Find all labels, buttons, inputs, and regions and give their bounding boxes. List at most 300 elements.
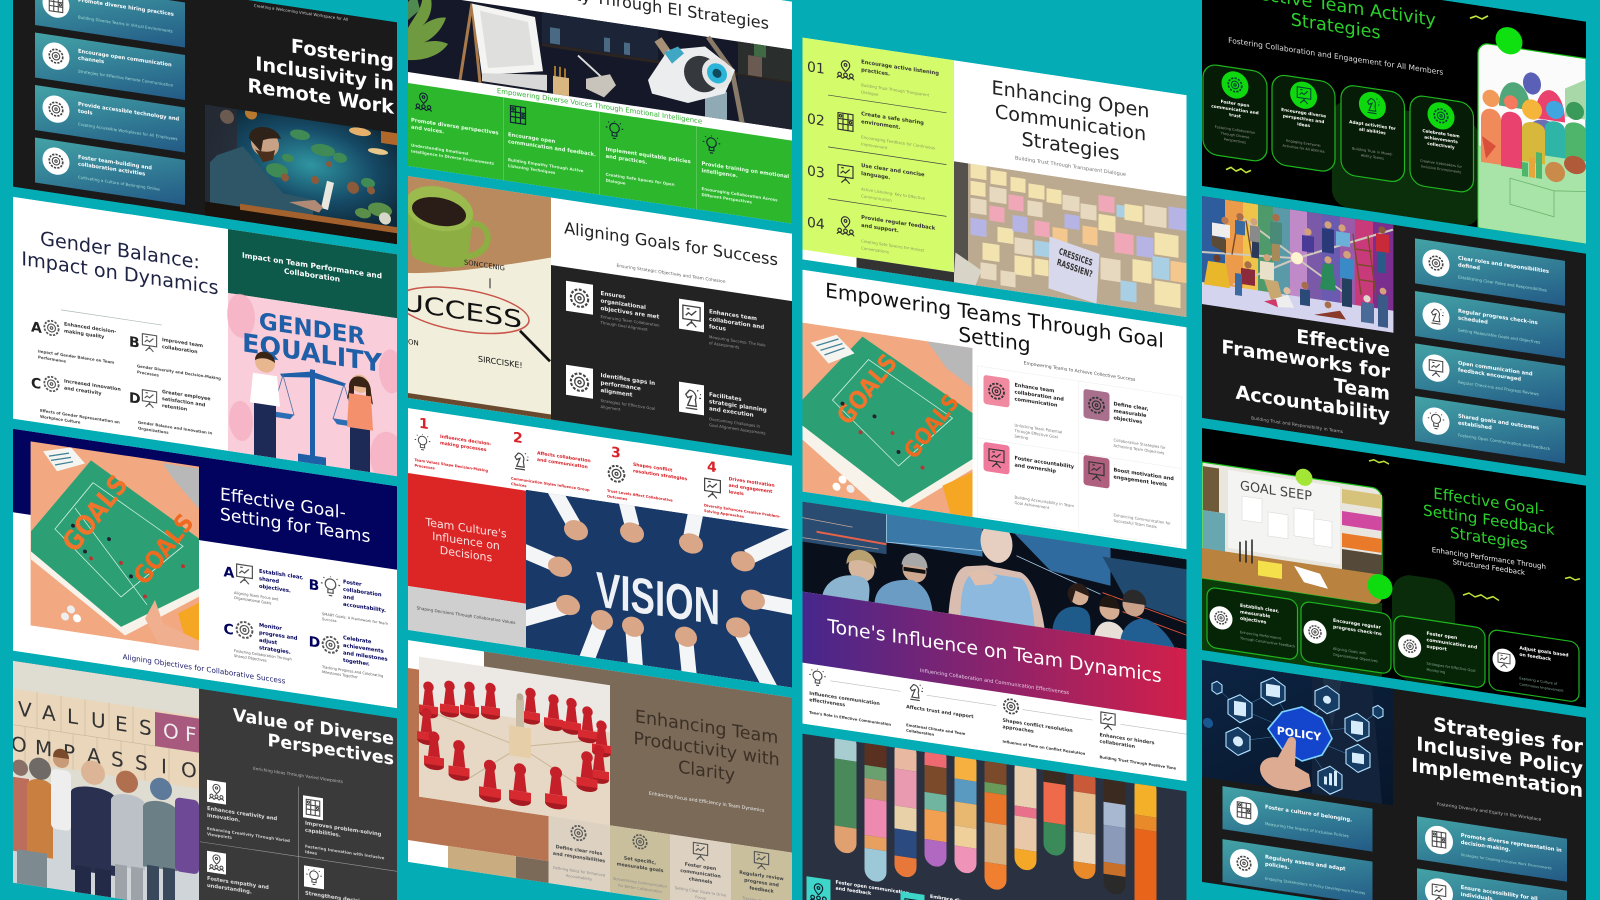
- item: embrace: [900, 889, 991, 900]
- title: Inclusive Policy: [1416, 732, 1583, 780]
- card 4: Successful Team Goals: [1114, 518, 1157, 529]
- card: encourage open communication: channels: [78, 55, 104, 65]
- subtitle: Enriching Ideas Through Varied Viewpoints: [253, 766, 343, 784]
- card 4: feedback: [749, 885, 774, 895]
- slide: Effective Goal-Setting Feedback Strategies: [1202, 428, 1586, 708]
- card 1: Enhancing Performance: [1240, 630, 1281, 641]
- item D: and milestones: [343, 650, 388, 663]
- image: values of compassion blocks and people: S: [139, 715, 152, 740]
- item B: Improved team: [162, 338, 203, 349]
- title: Fostering: [291, 34, 394, 73]
- card: accessible technology: Provide accessible technology and: [78, 101, 179, 123]
- image: coffee and success notebook: UCCESS: [402, 288, 522, 334]
- image: values of compassion blocks and people: U: [91, 708, 106, 734]
- column dividers: [504, 97, 696, 209]
- item B: collaboration: [162, 344, 198, 355]
- image: sticky note wall: [954, 161, 1186, 317]
- title: Setting for Teams: [220, 505, 370, 547]
- item C: strategies.: [259, 645, 291, 656]
- item 01: practices.: [861, 67, 890, 78]
- title: Clarity: [678, 758, 735, 786]
- card 2: objectives: [1114, 415, 1142, 426]
- title: Effective: [1296, 325, 1390, 362]
- subtitle: Fostering Collaboration and Engagement for All Members: [1228, 36, 1443, 77]
- image: gender equality poster: [227, 293, 397, 476]
- item D: Greater employee: [162, 390, 211, 402]
- card 2: Encourage diverse: [1281, 108, 1326, 120]
- item 4: Solving Approaches: [704, 509, 744, 519]
- item 2: and communication: [537, 457, 588, 470]
- title: Strategies: [1450, 524, 1528, 553]
- slide: Fostering Inclusivity in Remote Work: [13, 0, 397, 244]
- title: Effective Goal-: [220, 485, 346, 524]
- card 1: Defining Roles for Enhanced: [553, 866, 605, 878]
- item C: [32, 376, 120, 424]
- title: Perspectives: [268, 731, 394, 770]
- card 1: communication and: [1211, 103, 1259, 116]
- slide: Gender Balance: [13, 197, 406, 487]
- card: foster culture: Foster a culture of belonging.: [1265, 804, 1352, 823]
- card: encourage open communication: Encourage open communication: [78, 48, 172, 68]
- item 3: Strategies for Effective Goal: [600, 398, 655, 411]
- item 3: alignment: [600, 388, 633, 399]
- image: values of compassion blocks and people: E: [115, 711, 128, 737]
- item 03: [807, 155, 926, 208]
- title: Empowering Teams Through Goal: [825, 278, 1164, 353]
- title: Value of Diverse: [233, 706, 394, 750]
- divider: [828, 95, 946, 216]
- card 3: feedback encouraged: [1458, 367, 1521, 383]
- item A: A: [224, 564, 234, 582]
- item 2: of Assessments: [709, 340, 739, 350]
- item 04: [807, 207, 936, 261]
- green heading panel: [228, 229, 397, 318]
- image: values of compassion blocks and people: P: [63, 739, 75, 765]
- card 2: Engaging Everyone:: [1286, 139, 1321, 148]
- dark panel: [551, 265, 792, 456]
- item 01: [807, 51, 939, 106]
- image: sticky note wall: CRESSICES: [1058, 247, 1093, 269]
- item B: and: [343, 594, 354, 602]
- column 1: Understanding Emotional: [411, 142, 468, 156]
- column 4: Encouraging Collaboration Across: [702, 186, 778, 202]
- card 4: Boost motivation and: [1114, 467, 1174, 482]
- red title panel: Influence on: [432, 530, 500, 553]
- card 2: Encourage regular: [1333, 619, 1381, 631]
- item D: Tracking Progress and Celebrating: [322, 665, 383, 678]
- item B: B: [129, 334, 140, 352]
- item 3: Shapes conflict resolution: [1002, 719, 1073, 734]
- item 03: Active Listening: Key to Effective: [861, 186, 925, 201]
- item 1: making processes: [440, 440, 487, 453]
- card 1: Foster open: [1221, 100, 1249, 109]
- item D: achievements: [343, 643, 384, 655]
- card 3: support: [1426, 644, 1447, 653]
- card 2: Define clear,: [1114, 401, 1148, 412]
- subtitle: Building Trust Through Transparent Dialogue: [1015, 155, 1126, 178]
- item 4: levels: [729, 489, 744, 497]
- image: colourful people and savings: [1478, 23, 1586, 244]
- card 1: Define clear roles: [556, 845, 602, 857]
- item 3: [607, 444, 687, 510]
- item 02: Encouraging Feedback for Continuous: [861, 134, 935, 150]
- title: Remote Work: [248, 74, 395, 119]
- item D: Milestones Together: [322, 670, 358, 680]
- card 2: Organizational Objectives: [1333, 653, 1378, 663]
- item D: D: [309, 634, 320, 652]
- item D: satisfaction and: [162, 396, 206, 409]
- card: diverse representation: decision-making.: [1461, 840, 1511, 853]
- item C: Increased innovation: [64, 379, 121, 393]
- item 2: [906, 683, 974, 743]
- item 2: Enhances team: [709, 309, 757, 322]
- card 2: progress check-ins: [1333, 624, 1382, 637]
- card 4: [1410, 94, 1474, 194]
- image: values of compassion blocks and people: F: [185, 722, 197, 747]
- item 4: strategic planning: [709, 399, 767, 414]
- squiggles: [1226, 0, 1488, 209]
- item C: Workplace Culture: [40, 414, 81, 425]
- item 3: performance: [600, 380, 641, 392]
- orange block: [408, 668, 548, 861]
- item A: [224, 563, 303, 604]
- item 3: Trust Levels Affect Collaborative: [607, 489, 673, 503]
- card 1: Through Constructive Feedback: [1239, 636, 1296, 649]
- item A: Enhanced decision-: [64, 322, 116, 335]
- card 2: Activities for All Abilities: [1283, 144, 1325, 154]
- image: values of compassion blocks and people: S: [111, 747, 124, 772]
- item C: C: [224, 621, 234, 639]
- image: coffee and success notebook: SIRCCISKE!: [478, 355, 523, 370]
- card: assess and adapt: [1222, 839, 1372, 900]
- item A: Impact of Gender Balance on Team: [38, 348, 114, 365]
- image: goals board: GOALS: [56, 469, 134, 558]
- image: goals board: GOALS: [832, 349, 903, 431]
- item 1: organizational: [600, 298, 646, 311]
- card 4: collectively: [1427, 141, 1455, 151]
- card 4: engagement levels: [1114, 474, 1167, 488]
- slide: Effective Goal-Setting for Teams: [13, 429, 397, 708]
- card 4: on feedback: [1519, 652, 1552, 663]
- bottom strip brown: [516, 856, 548, 883]
- item 01: 01: [807, 59, 825, 78]
- green heading panel: Impact on Team Performance and: [242, 251, 382, 281]
- squiggles: [1369, 459, 1580, 613]
- card 3: Foster open: [1426, 632, 1457, 641]
- card 1: communication: [1014, 396, 1058, 409]
- slide: Effective Frameworks for Team Accountability: [1202, 196, 1586, 476]
- card 1: [1203, 63, 1267, 163]
- image: whiteboard office: GOAL SEEP: [1240, 479, 1312, 504]
- image: values of compassion blocks and people: M: [35, 735, 52, 762]
- subtitle: Enhancing Focus and Efficiency in Team Dynamics: [649, 791, 765, 814]
- card 2: [1301, 601, 1391, 674]
- image: whiteboard office: [1202, 462, 1382, 605]
- lime panel: [802, 38, 954, 272]
- card 3: Building Accountability in Team: [1014, 494, 1074, 508]
- card 1: [548, 816, 610, 892]
- title: Team: [1334, 374, 1390, 405]
- card: assess and adapt: Engaging Stakeholders in Policy Development Process: [1265, 876, 1365, 895]
- item 04: Creating Safe Spaces for Honest: [861, 238, 924, 253]
- item 1: [809, 668, 891, 727]
- image: goals board: GOALS: [898, 388, 964, 464]
- title: Inclusivity in: [255, 52, 394, 96]
- item D: retention: [162, 403, 188, 413]
- item: problem solving: capabilities.: [305, 828, 341, 839]
- item 3: [566, 365, 655, 417]
- item C: progress and: [259, 630, 298, 642]
- gradient title band: Influencing Collaboration and Communication Effectiveness: [920, 668, 1069, 696]
- card 3: Monitoring: [1426, 668, 1445, 674]
- card 1: Establishing Clear Roles and Responsibilities: [1458, 274, 1547, 293]
- image: gender equality poster: EQUALITY: [242, 328, 382, 379]
- item 4: 4: [707, 459, 717, 476]
- card 3: Regular Check-ins and Progress Reviews: [1458, 379, 1539, 397]
- image: people at holographic table: [802, 494, 1186, 649]
- item 1: 1: [419, 416, 429, 433]
- image: robot at desk: [408, 0, 792, 130]
- item 3: Outcomes: [607, 494, 627, 501]
- green heading panel: Collaboration: [284, 266, 340, 284]
- grid lines: [200, 786, 397, 900]
- item 4: Drives motivation: [729, 477, 775, 489]
- item C: Effects of Gender Representation on: [40, 408, 120, 425]
- item D: D: [129, 390, 141, 408]
- card: accessible technology: [35, 85, 185, 152]
- card: diverse representation: Strategies for Creating Inclusive Work Environments: [1461, 853, 1552, 870]
- item 01: Dialogue: [861, 89, 879, 97]
- item A: Performance: [38, 354, 66, 364]
- item: creativity: [207, 780, 290, 849]
- strap line: Empowering Diverse Voices Through Emotional Intelligence: [497, 87, 702, 126]
- subtitle: Building Trust and Responsibility in Teams: [1251, 415, 1344, 435]
- item 1: [414, 415, 492, 479]
- card 4: Shared goals and outcomes: [1458, 413, 1539, 432]
- card: promote diverse hiring: Building Diverse Teams in Virtual Environments: [78, 14, 173, 34]
- item 1: Influences communication: [809, 692, 880, 707]
- card 4: [731, 843, 792, 900]
- card 2: [1415, 291, 1565, 358]
- item 4: and engagement: [729, 483, 773, 495]
- item 01: Building Trust Through Transparent: [861, 82, 929, 97]
- card 3: and ownership: [1014, 462, 1056, 475]
- column 3: Dialogue: [606, 178, 626, 186]
- item A: Aligning Team Focus and: [234, 591, 278, 602]
- item B: Success: [322, 617, 337, 623]
- image: goals board: GOALS: [129, 509, 200, 591]
- card: team-building: [35, 138, 185, 205]
- title: Impact on Dynamics: [21, 247, 219, 300]
- item 3: Identifies gaps in: [600, 373, 655, 387]
- card 2: Achieving Team Objectives: [1114, 443, 1164, 455]
- card 2: measurable goals: [617, 861, 664, 874]
- title: Strategies: [1291, 10, 1381, 44]
- card 4: Celebrate team: [1422, 129, 1460, 140]
- column 3: and practices.: [606, 154, 647, 166]
- card 3: all abilities: [1359, 127, 1386, 137]
- title: Effective Goal-: [1433, 484, 1544, 519]
- card 2: Streamlining Communication: [613, 877, 667, 889]
- column 2: [508, 105, 596, 181]
- image: values of compassion blocks and people: [11, 660, 199, 900]
- item 1: Processes: [415, 463, 435, 471]
- card 3: Building Trust in Mixed-: [1352, 147, 1393, 157]
- card: accessibility: [1417, 868, 1567, 900]
- card: accessible technology: tools: [78, 108, 92, 117]
- card 4: Enhancing Communication for: [1114, 512, 1171, 526]
- image: values of compassion blocks and people: A: [42, 700, 56, 726]
- card 1: Through Diverse: [1220, 131, 1249, 140]
- card 3: [1394, 615, 1485, 688]
- item C: C: [31, 375, 41, 393]
- caption: Aligning Objectives for Collaborative Success: [123, 652, 286, 686]
- item 3: Influence of Tone on Conflict Resolution: [1002, 740, 1086, 756]
- card 3: Ability Teams: [1361, 153, 1384, 161]
- item 1: Ensures: [600, 291, 626, 301]
- card 1: Clear roles and responsibilities: [1458, 255, 1549, 275]
- item D: Celebrate: [343, 635, 371, 645]
- item 1: effectiveness: [809, 697, 845, 708]
- subtitle: Enhancing Performance Through: [1432, 545, 1546, 571]
- card 4: [1084, 455, 1174, 532]
- card: team-building: collaboration activities: [78, 161, 145, 178]
- item 4: and execution: [709, 406, 754, 419]
- item: empathy: Fosters empathy and: [207, 876, 269, 891]
- item: foster open communication: Foster open communication: [836, 881, 909, 897]
- item 02: environment.: [861, 119, 900, 131]
- item B: Gender Diversity and Decision-Making: [137, 363, 221, 381]
- column 1: Promote diverse perspectives: [411, 117, 499, 137]
- item C: adjust: [259, 638, 278, 646]
- title: Strategies: [1021, 127, 1120, 165]
- card: promote diverse hiring: [35, 0, 185, 48]
- card 4: Creative Icebreakers for: [1420, 159, 1462, 169]
- item: creativity: Enhances creativity and: [207, 806, 277, 822]
- image: values of compassion blocks and people: V: [18, 697, 32, 723]
- image: coffee and success notebook: [397, 174, 551, 419]
- item 1: Tone's Role in Effective Communication: [809, 711, 891, 727]
- card 4: progress and: [744, 877, 779, 889]
- red title panel: Team Culture's: [425, 516, 507, 541]
- card 4: Continuous Improvement: [1519, 682, 1564, 693]
- item B: B: [309, 577, 319, 595]
- card 3: Setting Clear Goals to Drive: [675, 886, 726, 898]
- item: creativity: Viewpoints: [207, 831, 232, 840]
- item B: [130, 333, 221, 380]
- card: foster culture: [1222, 786, 1372, 852]
- title: Accountability: [1235, 381, 1390, 427]
- gray subtitle panel: [408, 586, 526, 648]
- subtitle: Structured Feedback: [1453, 557, 1526, 577]
- connector lines: [830, 681, 1186, 734]
- item B: accountability.: [343, 602, 386, 614]
- card 3: Open communication and: [1458, 360, 1533, 378]
- title: Implementation: [1411, 753, 1583, 802]
- card: team-building: Foster team-building and: [78, 154, 152, 172]
- image: vision with hands: [518, 474, 800, 699]
- card: team-building: Cultivating a Culture of Belonging Online: [78, 174, 160, 192]
- title: Enhancing Team: [635, 707, 778, 749]
- image: goals board: [802, 323, 972, 517]
- card 2: for Better Collaboration: [618, 884, 662, 894]
- card 3: communication and: [1426, 637, 1477, 651]
- bottom strip: [448, 846, 516, 878]
- item 4: Overcoming Challenges in: [709, 416, 760, 429]
- card 4: Fostering Open Communication and Feedback: [1458, 432, 1551, 451]
- card 1: Perspectives: [1224, 137, 1246, 145]
- item 4: [704, 458, 781, 524]
- image: vision with hands: VISION: [596, 560, 720, 636]
- item 03: 03: [807, 163, 825, 182]
- item 4: Goal Alignment Assessments: [709, 422, 766, 436]
- item 04: Provide regular feedback: [861, 215, 935, 232]
- image: team with ladders: [1202, 196, 1393, 333]
- item A: Establish clear,: [259, 569, 303, 581]
- card 1: [1207, 587, 1298, 660]
- item 2: collaboration and: [709, 317, 764, 331]
- item: decisions: [304, 865, 360, 900]
- card 3: [1341, 84, 1404, 183]
- slide: Tone's Influence on Team Dynamics: [802, 494, 1186, 781]
- item 2: [679, 299, 766, 354]
- bottom dark strip: [856, 258, 954, 282]
- item C: Monitor: [259, 623, 282, 632]
- card 2: Regular progress check-ins: [1458, 308, 1538, 326]
- column 2: communication and feedback.: [508, 139, 596, 158]
- item B: SMART Goals: A Framework for Team: [322, 612, 388, 626]
- image: policy hologram: [1202, 658, 1393, 806]
- card 1: defined: [1458, 262, 1480, 272]
- image: classroom seen through vertical strips: [834, 730, 1156, 900]
- red title panel: [408, 473, 526, 604]
- image: values of compassion blocks and people: O: [181, 757, 197, 783]
- image: values of compassion blocks and people: O: [11, 732, 27, 758]
- item 4: [679, 382, 767, 436]
- card 3: [670, 834, 731, 900]
- item: problem solving: [303, 795, 385, 866]
- item 2: Affects collaboration: [537, 451, 591, 464]
- card 3: Foster accountability: [1014, 455, 1074, 470]
- item: problem solving: Fostering Innovation with Inclusive: [305, 844, 384, 860]
- card 3: channels: [689, 876, 712, 886]
- card 2: [610, 825, 670, 900]
- item B: Processes: [137, 369, 160, 378]
- green lower band: [1202, 576, 1382, 677]
- item 3: [1002, 698, 1086, 756]
- item D: [130, 389, 212, 434]
- green accent circle: [1368, 572, 1392, 601]
- subtitle: Empowering Teams to Achieve Collective Success: [1024, 360, 1136, 383]
- card 2: [1084, 389, 1166, 456]
- lime accent circle: [1296, 468, 1312, 487]
- title: Productivity with: [633, 729, 780, 771]
- item D: together.: [343, 658, 370, 668]
- slide: Team Culture's Influence on Decisions: [408, 408, 800, 699]
- item: problem solving: Improves problem-solving: [305, 821, 381, 838]
- item A: A: [31, 319, 42, 337]
- slide: Empowering Teams Through Goal Setting: [802, 270, 1186, 549]
- image: values of compassion blocks and people: I: [161, 754, 167, 779]
- image: coffee and success notebook: SONCCENIG: [464, 258, 505, 273]
- item: creativity: innovation.: [207, 813, 240, 824]
- card 2: scheduled: [1458, 315, 1488, 326]
- image: values of compassion blocks and people: A: [87, 743, 101, 769]
- image: policy hologram: POLICY: [1277, 724, 1322, 744]
- item 1: Influences decision-: [440, 435, 491, 448]
- card 4: Regularly review: [739, 871, 784, 882]
- card: foster culture: Measuring the Impact of Inclusive Policies: [1265, 821, 1349, 838]
